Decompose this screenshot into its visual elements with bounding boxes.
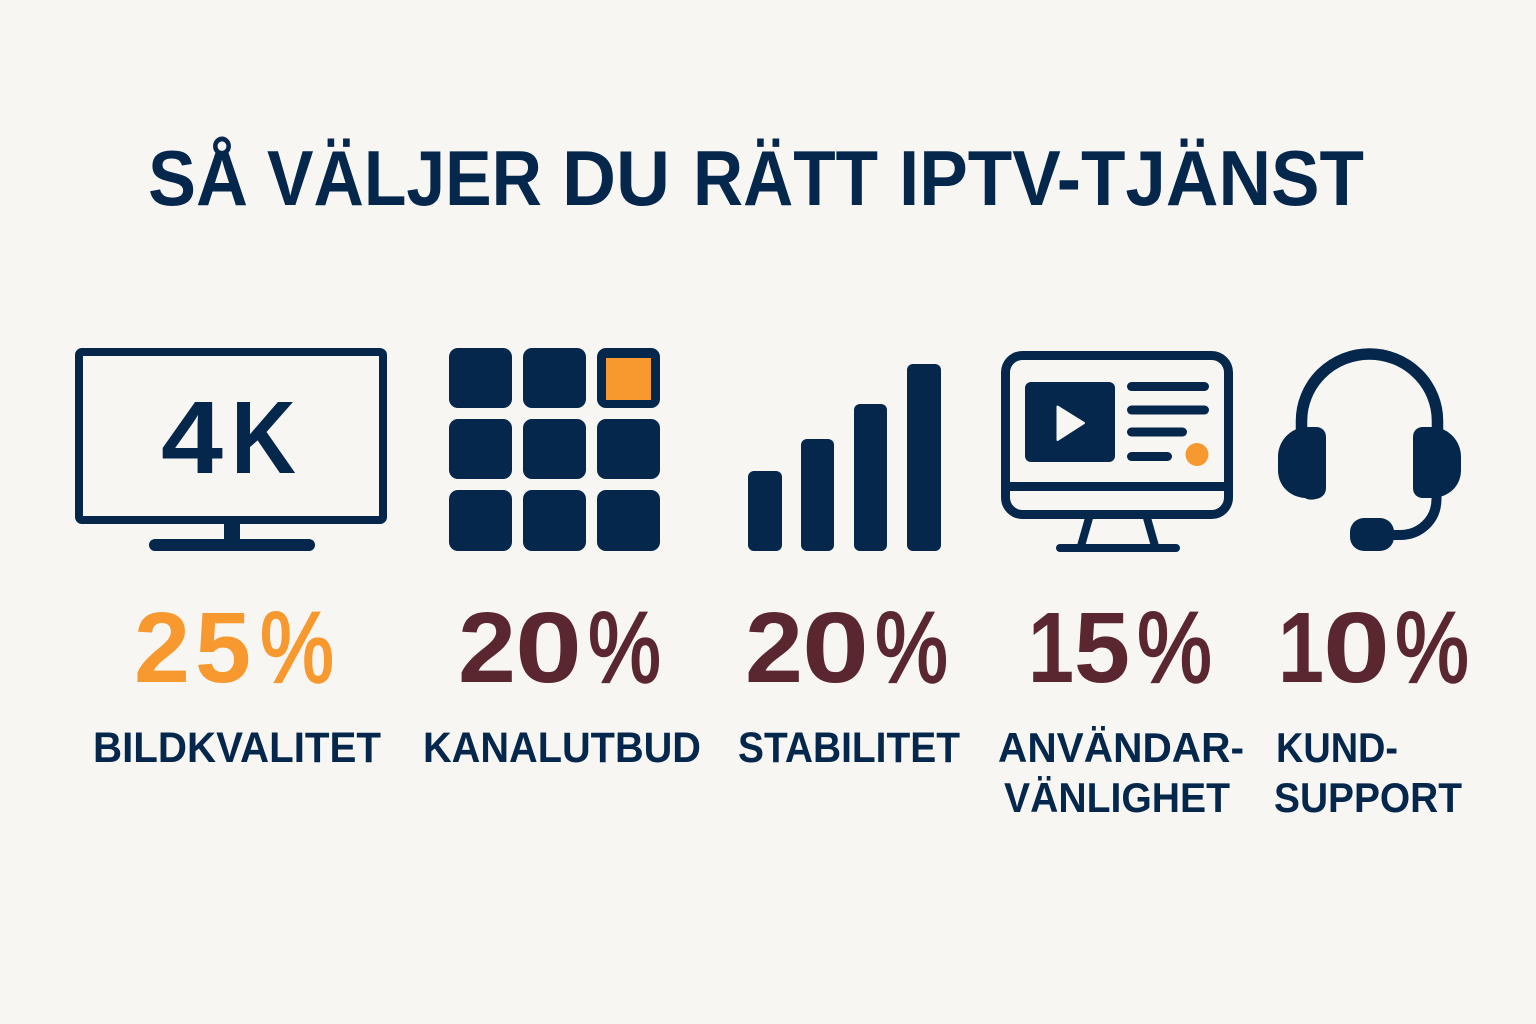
- title: [148, 134, 1364, 222]
- percentage: 20%: 2: [745, 592, 803, 704]
- label: bildkvalitet: BILDKVALITET: [93, 724, 381, 772]
- percentage: 25%: [134, 592, 334, 704]
- icon: headset: [1278, 354, 1461, 551]
- title: DU: [562, 134, 670, 222]
- column: användarvänlighet: [998, 356, 1244, 821]
- percentage: 10%: [1278, 592, 1469, 704]
- label: användar-vänlighet: ANVÄNDAR-: [998, 724, 1244, 771]
- title: SÅ: [148, 134, 248, 222]
- percentage: 15%: %: [1137, 592, 1212, 704]
- icon: 4K TV: 4: [161, 380, 223, 495]
- icon: 4K TV: K: [231, 380, 296, 495]
- title: IPTV-TJÄNST: [899, 134, 1364, 222]
- label: användar-vänlighet: [998, 724, 1244, 821]
- icon: signal bars: [748, 364, 941, 551]
- column: bildkvalitet: [79, 352, 383, 772]
- percentage: 15%: [1028, 592, 1212, 704]
- column: stabilitet: [738, 364, 960, 772]
- percentage: 20%: %: [588, 592, 661, 704]
- label: användar-vänlighet: VÄNLIGHET: [1004, 774, 1230, 821]
- percentage: 10%: %: [1395, 592, 1469, 704]
- icon: monitor with video player: [1005, 356, 1229, 552]
- label: kund-support: KUND-: [1276, 724, 1398, 771]
- column: kundsupport: [1274, 354, 1469, 821]
- percentage: 20%: [745, 592, 948, 704]
- label: kund-support: SUPPORT: [1274, 774, 1462, 821]
- label: kund-support: [1274, 724, 1462, 821]
- percentage: 25%: 5: [195, 592, 251, 704]
- percentage: 25%: %: [260, 592, 334, 704]
- percentage: 20%: 0: [515, 592, 582, 704]
- percentage: 10%: 1: [1278, 592, 1324, 704]
- icon: 4K TV: [79, 352, 383, 551]
- icon: channel grid: [449, 348, 660, 551]
- label: stabilitet: STABILITET: [738, 724, 960, 772]
- title: VÄLJER: [267, 134, 542, 222]
- percentage: 25%: 2: [134, 592, 190, 704]
- column: kanalutbud: [423, 348, 701, 772]
- title: RÄTT: [693, 134, 878, 222]
- percentage: 15%: 1: [1028, 592, 1074, 704]
- percentage: 20%: 2: [458, 592, 516, 704]
- percentage: 20%: 0: [802, 592, 869, 704]
- percentage: 15%: 5: [1074, 592, 1130, 704]
- percentage: 10%: 0: [1323, 592, 1390, 704]
- percentage: 20%: %: [875, 592, 948, 704]
- label: kanalutbud: KANALUTBUD: [423, 724, 701, 772]
- percentage: 20%: [458, 592, 661, 704]
